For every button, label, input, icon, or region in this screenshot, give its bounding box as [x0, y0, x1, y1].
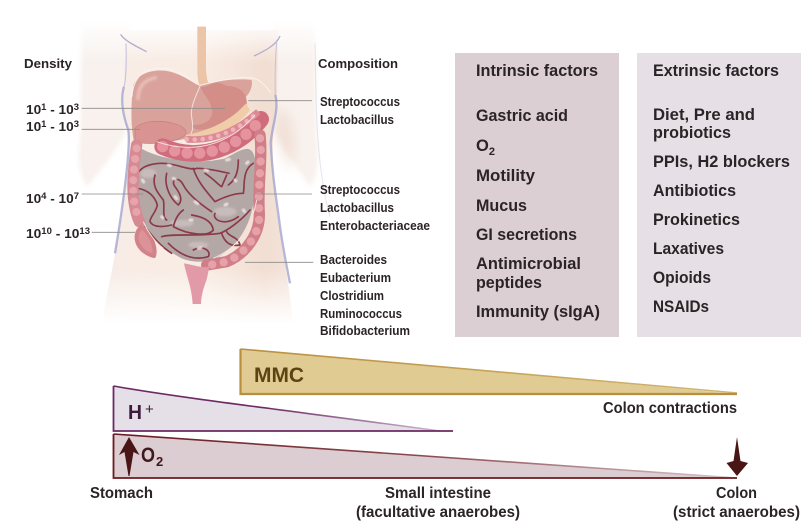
MMC wedge: MMC [254, 364, 304, 387]
composition lists: Streptococcus [320, 95, 400, 109]
composition lists: Lactobacillus [320, 113, 394, 127]
panel: intrinsic factors: Mucus [476, 197, 527, 215]
leader lines [82, 101, 313, 262]
density values: 1 [41, 102, 46, 112]
panel: extrinsic factors: Laxatives [653, 240, 724, 258]
axis label: colon: Colon [716, 485, 757, 502]
panel: extrinsic factors: probiotics [653, 124, 731, 142]
composition lists: Eubacterium [320, 271, 391, 285]
stomach [193, 83, 247, 130]
axis label: small intestine [356, 485, 520, 521]
panel: intrinsic factors [455, 53, 619, 337]
composition lists: Bacteroides [320, 253, 387, 267]
composition lists: Bifidobacterium [320, 324, 410, 338]
panel: extrinsic factors: Opioids [653, 269, 711, 287]
density values: - 10 [46, 191, 74, 206]
esophagus [197, 27, 209, 87]
density values: - 10 [52, 226, 79, 241]
panel: intrinsic factors: GI secretions [476, 226, 577, 244]
density values: 13 [79, 226, 90, 236]
density values [26, 102, 90, 241]
panel: extrinsic factors: Antibiotics [653, 182, 736, 200]
composition lists [320, 95, 430, 338]
axis label: small intestine: Small intestine [385, 485, 491, 502]
panel: extrinsic factors: NSAIDs [653, 298, 709, 316]
panel: intrinsic factors: Gastric acid [476, 107, 568, 125]
composition heading: Composition [318, 56, 398, 71]
axis label: stomach: Stomach [90, 485, 153, 502]
panel: extrinsic factors: PPIs, H2 blockers [653, 153, 790, 171]
density values: 10 [41, 226, 52, 236]
density values: 10 [26, 191, 40, 206]
density values: 4 [41, 191, 46, 201]
density values: 3 [74, 102, 79, 112]
H+ wedge: H [128, 402, 142, 424]
colon contractions label: Colon contractions [603, 400, 737, 417]
panel: extrinsic factors: Extrinsic factors [653, 62, 779, 80]
density values: 10 [26, 119, 40, 134]
torso and arms skin [50, 0, 350, 333]
density values: 10 [26, 102, 40, 117]
density values: 1 [41, 119, 46, 129]
composition lists: Clostridium [320, 289, 384, 303]
O2 wedge: O [141, 444, 155, 467]
density values: - 10 [46, 119, 74, 134]
composition lists: Ruminococcus [320, 307, 402, 321]
small intestine [137, 147, 256, 262]
panel: intrinsic factors: Immunity (sIgA) [476, 303, 600, 321]
axis label: colon: (strict anaerobes) [673, 504, 800, 521]
density values: - 10 [46, 102, 74, 117]
O2 wedge [114, 434, 737, 478]
arrow: oxygen falling toward colon [726, 437, 748, 476]
O2 wedge: 2 [156, 454, 163, 469]
composition lists: Lactobacillus [320, 201, 394, 215]
anatomy illustration: torso and digestive tract [50, 0, 350, 333]
liver [131, 68, 271, 143]
panel: extrinsic factors: Diet, Pre and [653, 106, 755, 124]
H+ wedge [114, 386, 453, 431]
H+ wedge: + [145, 401, 154, 418]
panel: intrinsic factors: Motility [476, 167, 536, 185]
panel: intrinsic factors: O [476, 137, 489, 155]
density values: 7 [74, 191, 79, 201]
panel: intrinsic factors: Antimicrobial [476, 255, 581, 273]
panel: extrinsic factors: Prokinetics [653, 211, 740, 229]
axis label: small intestine: (facultative anaerobes) [356, 504, 520, 521]
composition lists: Streptococcus [320, 183, 400, 197]
panel: intrinsic factors: Intrinsic factors [476, 62, 598, 80]
axis label: colon [673, 485, 800, 521]
density heading: Density [24, 56, 73, 71]
MMC wedge [240, 349, 737, 394]
panel: intrinsic factors: peptides [476, 274, 542, 292]
density values: 10 [26, 226, 40, 241]
large intestine [133, 112, 261, 304]
composition lists: Enterobacteriaceae [320, 219, 430, 233]
density values: 3 [74, 119, 79, 129]
pancreas and duodenum [135, 103, 250, 143]
panel: extrinsic factors [637, 53, 801, 337]
panel: intrinsic factors: 2 [489, 146, 495, 158]
arrow: oxygen rising toward stomach [119, 437, 140, 476]
